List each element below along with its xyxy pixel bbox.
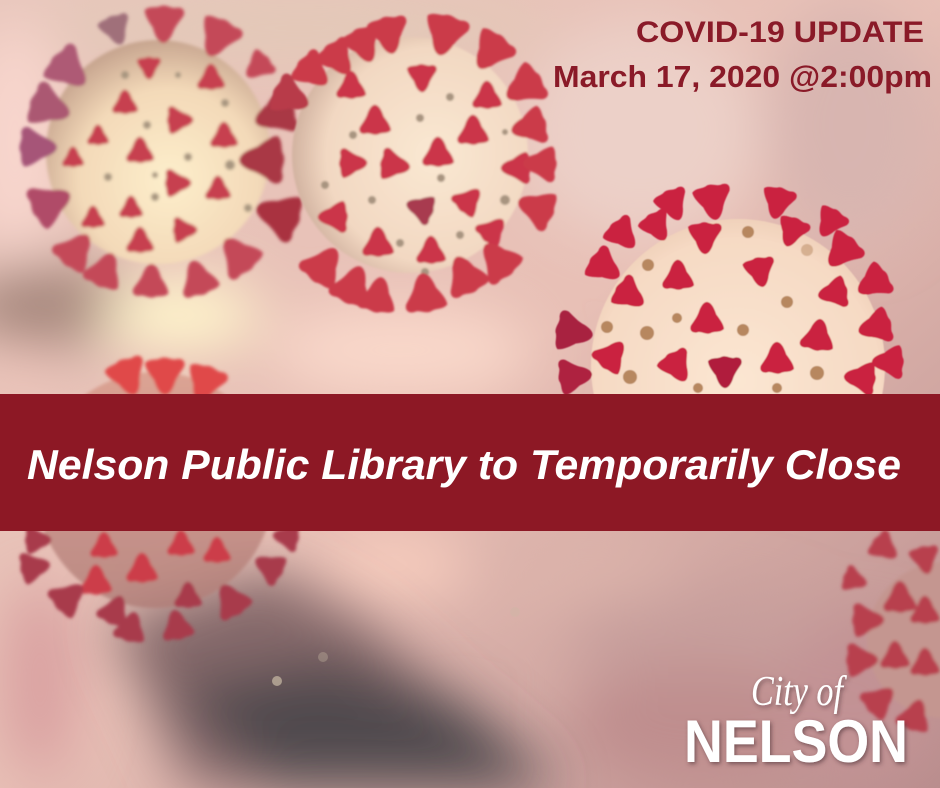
- virus: lower left, behind banner: [18, 353, 301, 645]
- inner spikes: [62, 57, 238, 253]
- logo: City of Nelson: [684, 669, 908, 775]
- small tan spikes: [601, 226, 824, 393]
- small floating particles: [272, 607, 520, 686]
- update date: March 17, 2020 @2:00pm: [553, 59, 932, 94]
- virus: top left, blurred: [19, 4, 307, 300]
- rim spikes: [266, 9, 561, 316]
- dark shadow band: [110, 570, 560, 788]
- virus: top centre, blurred: [266, 9, 561, 316]
- update heading: COVID-19 UPDATE: [636, 16, 924, 49]
- spikes: [552, 182, 904, 396]
- virus: right, in focus: [552, 182, 904, 513]
- virus: lower right edge: [839, 528, 940, 736]
- banner: [0, 394, 940, 531]
- rim spikes: [19, 4, 307, 300]
- banner headline: Nelson Public Library to Temporarily Close: [27, 441, 901, 488]
- inner spikes: [318, 64, 531, 264]
- logo: City of Nelson: City of: [751, 669, 847, 715]
- logo: City of Nelson: NELSON: [684, 708, 908, 775]
